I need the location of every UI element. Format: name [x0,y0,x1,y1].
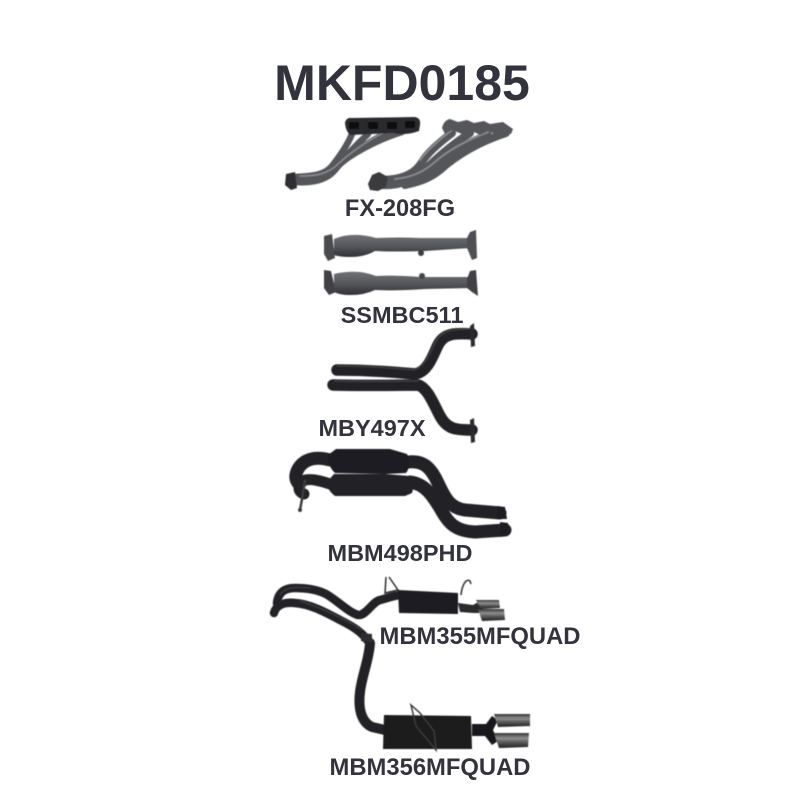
lower cat pipe [324,270,478,296]
left header pipes [296,132,402,182]
product: mufflers MBM498PHD [296,449,509,537]
upper cat pipe [324,230,477,261]
title: MKFD0185 [274,55,530,111]
product: cats SSMBC511 [324,230,478,296]
label: MBY497X: MBY497X [318,415,426,441]
lower hangers [411,705,436,750]
product: rear muffler MBM356MFQUAD [274,601,530,750]
right header flange [442,119,513,135]
lower rear pipe [274,601,385,730]
product: Y-pipe MBY497X [333,323,475,443]
product: headers FX-208FG [285,117,513,191]
lower chrome tips [472,714,530,748]
upper muffler branch [296,449,507,519]
left header collector flange [285,172,297,190]
upper Y branch [337,323,475,374]
label: SSMBC511: SSMBC511 [341,302,463,328]
upper rear pipe [277,587,400,615]
hanger wire [300,480,305,510]
lower muffler [383,715,472,749]
left header flange [345,117,420,135]
product: rear muffler MBM355MFQUAD [277,577,505,621]
upper chrome tips [458,600,505,621]
right header pipes [380,130,506,185]
lower muffler branch [299,474,509,537]
lower Y branch [333,381,475,443]
label: FX-208FG: FX-208FG [345,196,455,222]
label: MBM355MFQUAD: MBM355MFQUAD [380,623,580,650]
label: MBM356MFQUAD: MBM356MFQUAD [330,754,530,781]
upper hangers [385,577,471,595]
right header collector flange [368,172,388,191]
upper muffler [398,590,458,614]
label: MBM498PHD: MBM498PHD [328,540,472,566]
